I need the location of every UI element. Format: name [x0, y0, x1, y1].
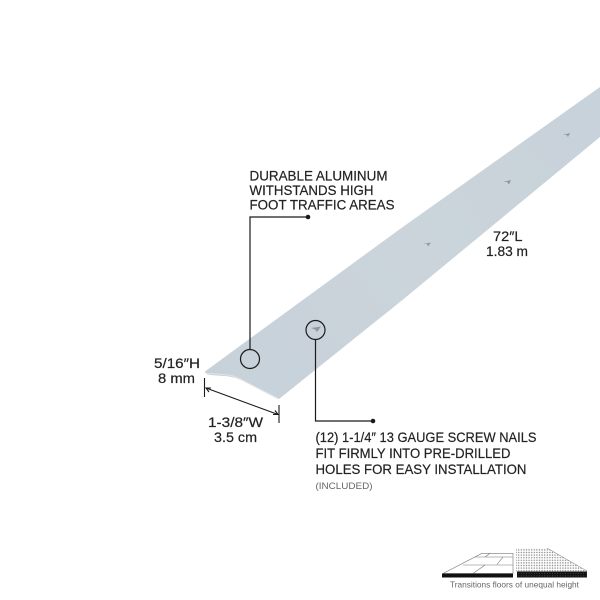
callout text: durable aluminum: FOOT TRAFFIC AREAS: [250, 196, 394, 212]
included note: (INCLUDED): [316, 481, 372, 492]
height label: 5/16″H: [154, 355, 200, 371]
left floor: tile: [442, 553, 513, 578]
callout text: durable aluminum: WITHSTANDS HIGH: [250, 182, 374, 198]
callout text: screw nails: FIT FIRMLY INTO PRE-DRILLED: [316, 445, 510, 461]
width dimension arrow: [204, 378, 279, 423]
icon: screw holes: [311, 133, 570, 332]
right floor: carpet: [516, 548, 587, 578]
leader line: screw nails: [306, 320, 375, 423]
aluminum transition strip: [205, 87, 600, 399]
callout text: screw nails: HOLES FOR EASY INSTALLATION: [316, 461, 526, 477]
callout text: durable aluminum: DURABLE ALUMINUM: [250, 168, 388, 184]
length label: 72″L: [493, 228, 523, 244]
width label: 3.5 cm: [214, 429, 257, 445]
length label: 1.83 m: [486, 243, 528, 259]
width label: 1-3/8″W: [208, 414, 264, 430]
height label: 8 mm: [158, 370, 195, 386]
callout text: screw nails: (12) 1-1/4″ 13 GAUGE SCREW NAILS: [316, 429, 536, 445]
icon: floor transition: [442, 548, 587, 590]
leader line: durable aluminum: [240, 215, 310, 368]
icon caption: Transitions floors of unequal height: [450, 580, 580, 590]
